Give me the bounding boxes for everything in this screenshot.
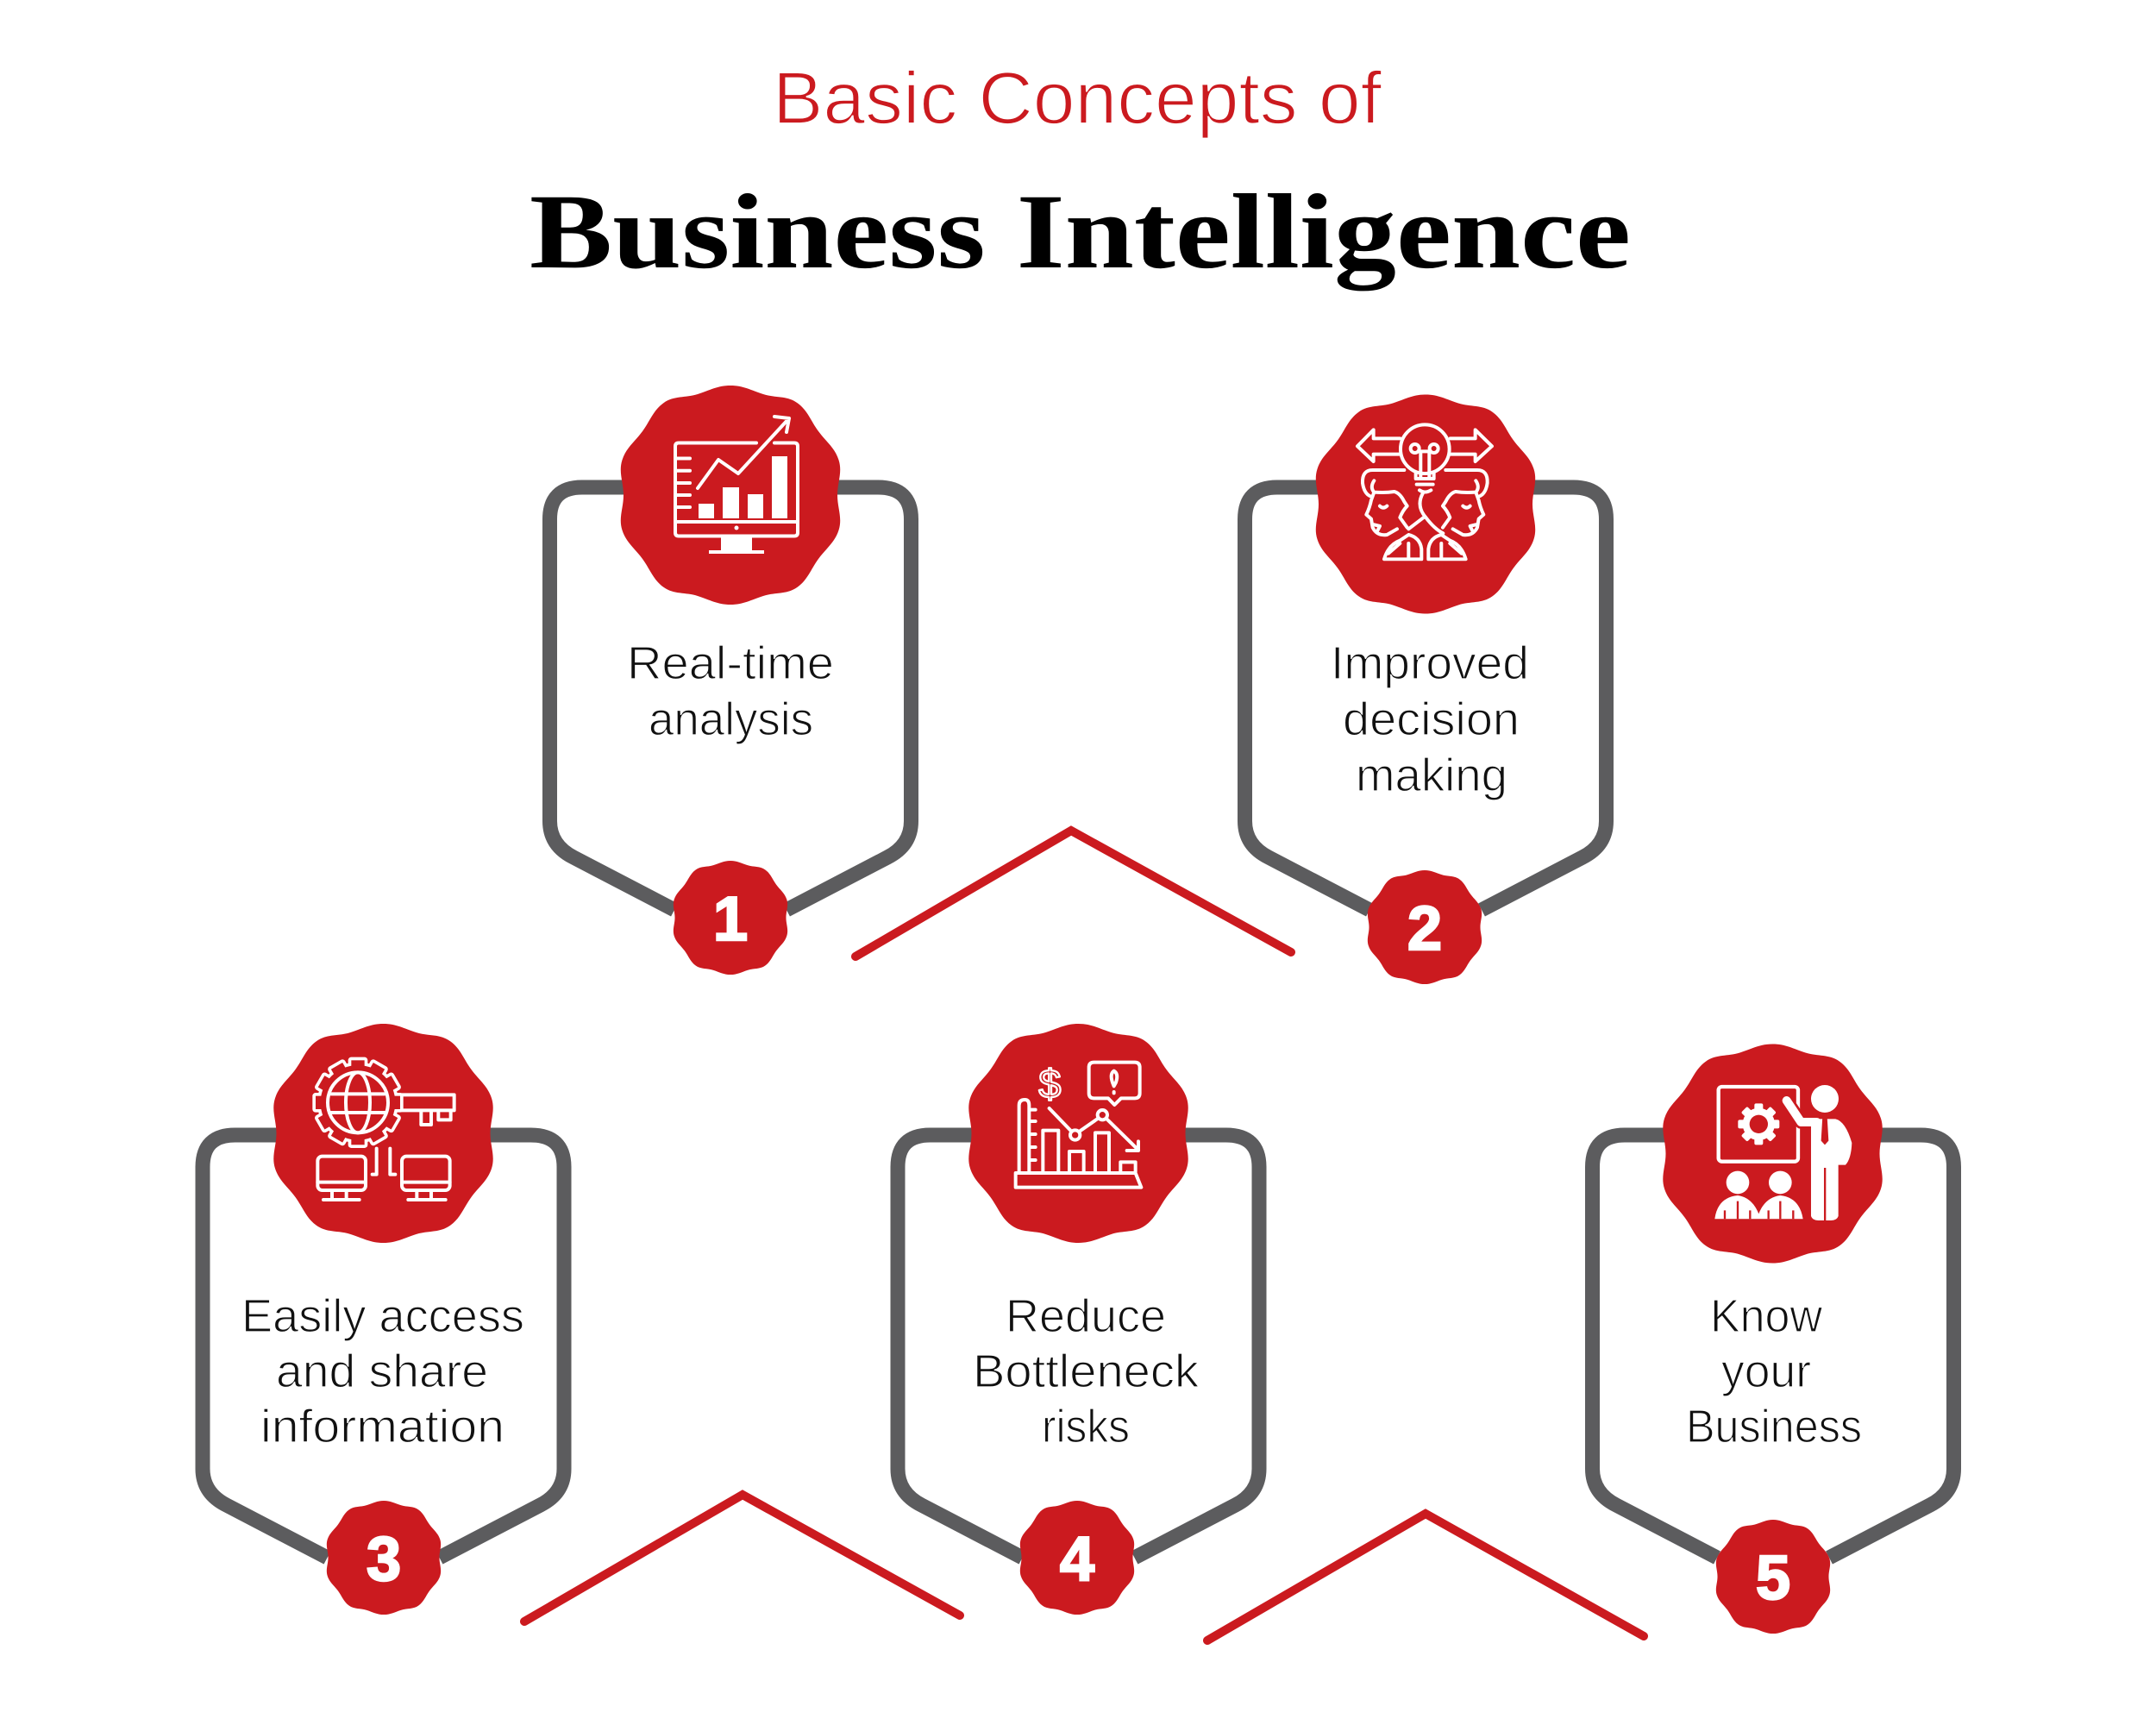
arrow: chevron between boxes 4 and 5 [1207,1514,1644,1640]
badge: number 5 [1716,1520,1830,1634]
badge: number 2 [1368,870,1482,984]
text: Reduce Bottleneck risks: Reduce [1006,1290,1166,1342]
icon: monitor with rising chart [675,417,798,554]
panel: box 3 easily access and share information [203,1024,564,1615]
badge: number 1: 1 [713,885,748,954]
badge: number 2: 2 [1407,894,1442,963]
icon: declining chart with dollar and alert [1016,1061,1141,1188]
text: Easily access and share information: information [260,1401,505,1452]
text: Real-time analysis: Real-time [627,637,834,689]
text: Improved decision making: Improved [1331,637,1529,689]
badge: number 4 [1020,1501,1134,1615]
badge: number 4: 4 [1060,1525,1094,1594]
text: Improved decision making: making [1356,750,1507,801]
icon: globe key and computers [316,1060,454,1200]
heading: Business Intelligence: Business Intelligence [530,172,1631,292]
panel: box 5 know your business [1592,1044,1954,1634]
text: Real-time analysis: analysis [649,693,813,745]
text: Know your Business: your [1721,1346,1811,1397]
icon: declining chart with dollar and alert: $ [1038,1061,1061,1106]
text: Easily access and share information [241,1290,524,1452]
text: Know your Business [1686,1290,1862,1452]
arrow: chevron between boxes 1 and 2 [856,831,1291,957]
badge: icon 3 [273,1024,493,1243]
icon: two heads and lightbulb [1357,424,1492,559]
text: Reduce Bottleneck risks [973,1290,1200,1452]
icon: presenter with board and audience [1714,1085,1852,1220]
arrow: chevron between boxes 3 and 4 [524,1495,960,1622]
badge: number 3 [327,1501,441,1615]
text: Reduce Bottleneck risks: risks [1042,1401,1130,1452]
text: Easily access and share information: Easily access [241,1290,524,1342]
badge: number 3: 3 [367,1525,401,1594]
text: Improved decision making: decision [1343,693,1520,745]
badge: icon 1 [621,386,840,605]
text: Know your Business: Business [1686,1401,1862,1452]
text: Improved decision making [1331,637,1529,801]
text: Know your Business: Know [1710,1290,1823,1342]
text: Real-time analysis [627,637,834,745]
badge: number 5: 5 [1756,1544,1790,1613]
panel: box 4 reduce bottleneck risks [898,1024,1259,1615]
badge: number 1 [674,861,787,975]
badge: icon 5 [1663,1044,1883,1263]
text: Reduce Bottleneck risks: Bottleneck [973,1346,1200,1397]
badge: icon 4 [968,1024,1188,1243]
badge: icon 2 [1316,395,1535,614]
panel: box 1 real-time analysis [550,386,911,975]
panel: box 2 improved decision making [1245,395,1606,984]
text: Easily access and share information: and share [276,1346,488,1397]
title: Basic Concepts of: Basic Concepts of [773,58,1382,140]
